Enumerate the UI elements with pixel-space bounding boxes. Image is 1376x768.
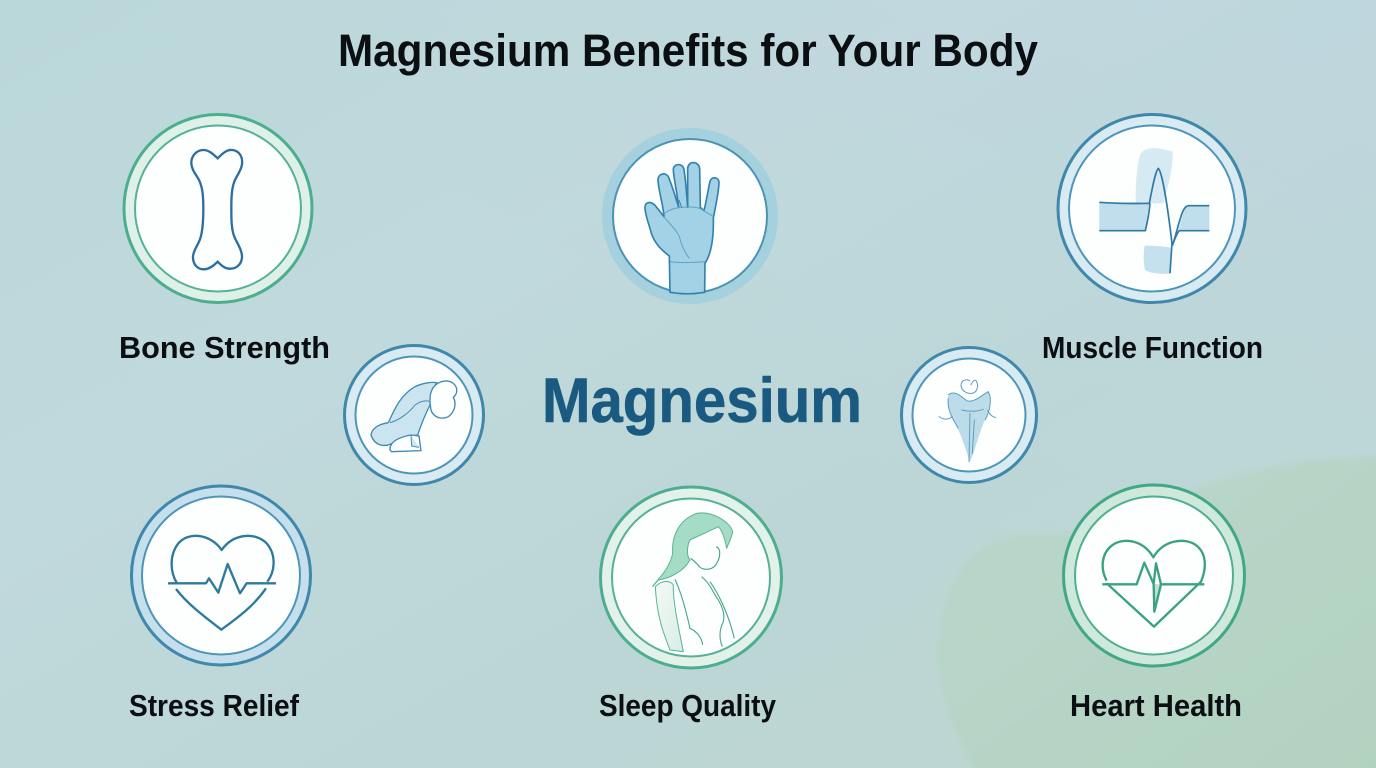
icon ring: muscle function (1058, 114, 1246, 302)
label: sleep quality: Sleep Quality (599, 688, 777, 723)
panel: stress relief (129, 486, 310, 723)
icon: figure (939, 380, 996, 462)
icon: woman (653, 513, 734, 652)
icon ring: stress relief (132, 486, 310, 665)
label: heart health: Heart Health (1070, 688, 1242, 723)
title: Magnesium Benefits for Your Body (338, 25, 1038, 76)
panel: muscle function (1042, 114, 1263, 365)
icon ring: hand (602, 128, 778, 304)
icon: bone (191, 150, 242, 269)
panel: heart health (1064, 485, 1244, 723)
icon: heart with ECG (1102, 541, 1205, 627)
panel: back posture (344, 346, 484, 484)
panel: sleep quality (599, 487, 782, 723)
icon ring: back posture (344, 346, 484, 484)
icon ring: bone strength (124, 114, 312, 302)
icon: hand (645, 163, 719, 294)
panel: hand (602, 128, 778, 304)
icon ring: heart health (1064, 485, 1244, 666)
panel: bone strength (119, 114, 330, 365)
label: bone strength: Bone Strength (119, 330, 330, 365)
panel: spine figure (902, 348, 1036, 482)
icon ring: spine figure (902, 348, 1036, 482)
icon: heart with pulse (168, 536, 276, 630)
central heading: Magnesium: Magnesium (542, 366, 862, 436)
icon: bent body (371, 381, 457, 452)
label: muscle function: Muscle Function (1042, 330, 1263, 365)
icon: muscle pulse (1099, 148, 1209, 274)
label: stress relief: Stress Relief (129, 688, 300, 723)
icon ring: sleep quality (600, 487, 782, 668)
